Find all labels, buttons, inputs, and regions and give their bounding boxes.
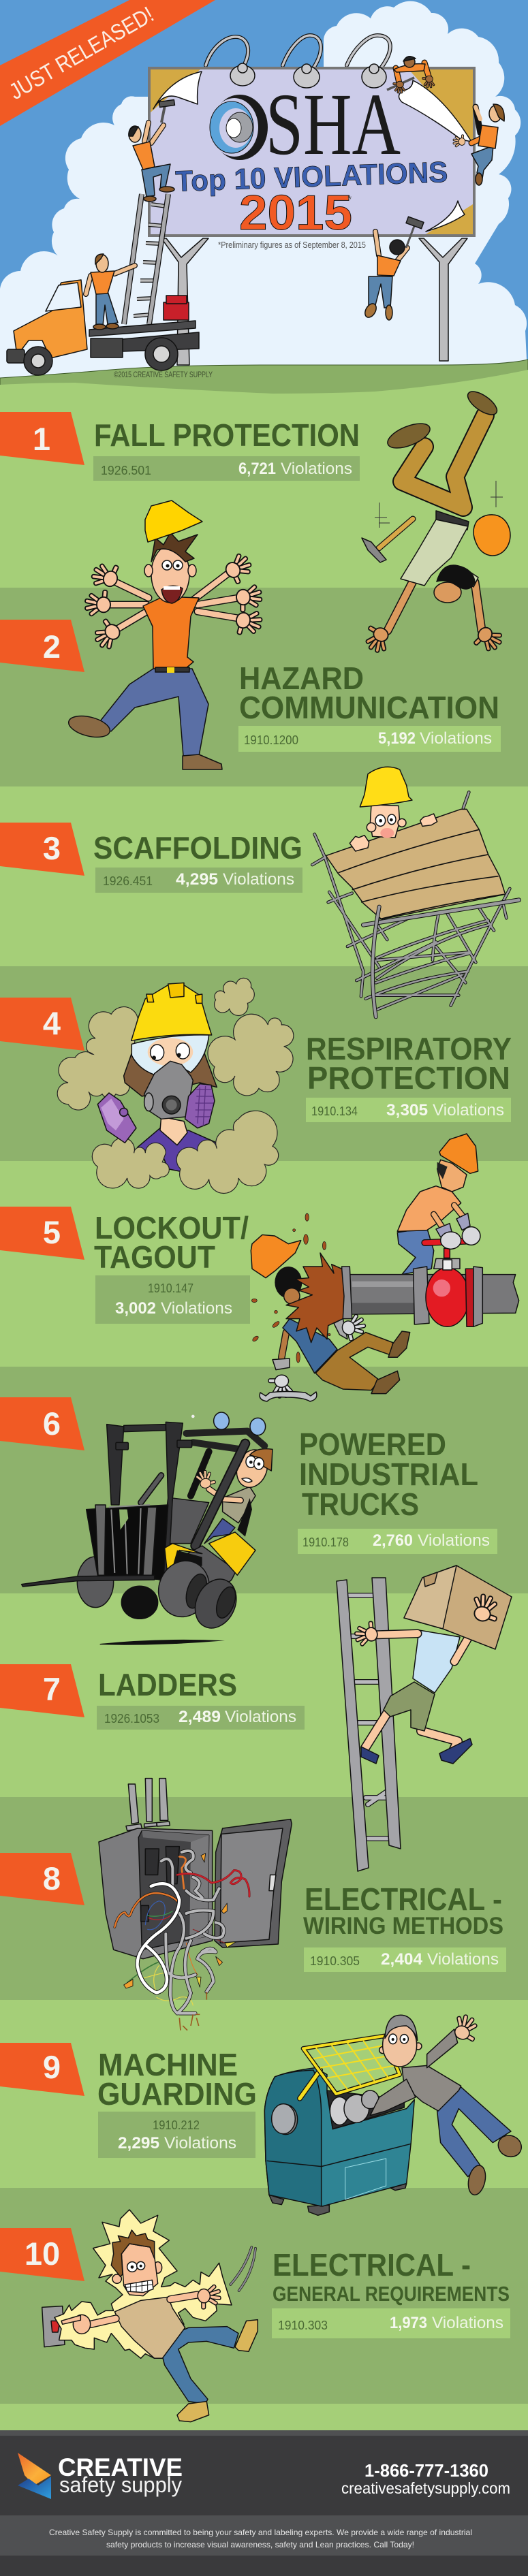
number tag 9 <box>0 2043 84 2096</box>
illustration: worker caught in machine <box>264 2011 525 2215</box>
cage roof and pillar <box>186 1431 264 1546</box>
illustration: worker on ladder carrying box <box>337 1565 512 1871</box>
billboard heading: top 10 violations: Top 10 VIOLATIONS <box>175 156 448 198</box>
lights <box>191 1412 266 1435</box>
stat bar: 1910.305 <box>310 1954 360 1968</box>
hand <box>449 2011 482 2044</box>
thin coloured wires <box>127 1901 225 2005</box>
title: HAZARD <box>239 661 364 696</box>
legs <box>361 1713 472 1764</box>
title: POWERED <box>299 1427 446 1462</box>
ground shadow <box>100 1640 225 1645</box>
panel 3: scaffolding <box>0 767 519 1017</box>
panel 8: electrical wiring methods <box>0 1779 506 2031</box>
stat bar: Violations <box>164 2134 236 2152</box>
pliers <box>230 2247 255 2291</box>
title <box>94 1210 249 1275</box>
banner: just released <box>0 0 215 126</box>
number tag 10 <box>0 2228 84 2281</box>
left side panel <box>264 2070 322 2206</box>
title: WIRING METHODS <box>303 1913 503 1939</box>
worker hanging from sign <box>362 217 424 320</box>
illustration: forklift <box>22 1412 273 1645</box>
title: GUARDING <box>97 2076 257 2112</box>
logo icon <box>18 2453 51 2499</box>
worker on top of sign <box>387 57 435 93</box>
worker on truck <box>86 254 135 330</box>
front tires <box>151 1554 244 1635</box>
body <box>172 1546 236 1612</box>
title: FALL PROTECTION <box>94 417 360 453</box>
panel 2: hazard communication <box>0 500 501 769</box>
illustration: electrical box with tangled wires <box>99 1779 292 2031</box>
arms <box>371 1621 478 1661</box>
stat bar: Violations <box>433 1101 504 1119</box>
shirt <box>138 1128 217 1171</box>
contact: creativesafetysupply.com <box>341 2479 510 2497</box>
stat bar: 3,002 <box>115 1299 156 1318</box>
title <box>306 1031 512 1096</box>
title: SCAFFOLDING <box>93 830 302 865</box>
number tag 3 <box>0 823 84 876</box>
stat bar <box>306 1098 511 1122</box>
title: ELECTRICAL - <box>273 2247 471 2283</box>
number tag 1 <box>0 412 84 465</box>
billboard frame <box>149 68 474 236</box>
panel 1: fall protection <box>0 387 510 657</box>
machine body <box>264 2068 414 2206</box>
filters <box>97 1084 215 1143</box>
stat bar: Violations <box>161 1299 232 1318</box>
arms <box>91 2295 198 2324</box>
illustration: worker in respirator with dust clouds <box>57 978 294 1193</box>
box <box>99 1828 213 1959</box>
company statement: safety products to increase visual awareness, safety and Lean practices. Call Today! <box>106 2540 414 2549</box>
number tag 6: 6 <box>43 1405 61 1442</box>
wire ends <box>179 1992 206 2031</box>
illustration: scaffold and worker <box>312 767 519 1017</box>
stat bar: 2,760 <box>373 1531 413 1550</box>
yellow fender <box>165 1544 202 1580</box>
carriage <box>87 1505 168 1580</box>
grey cables <box>161 1851 224 2014</box>
company statement <box>49 2528 472 2549</box>
stat bar: 1926.1053 <box>104 1712 159 1726</box>
title <box>303 1881 503 1939</box>
access door <box>345 2159 386 2199</box>
number tag 4: 4 <box>43 1005 61 1041</box>
copyright note: ©2015 CREATIVE SAFETY SUPPLY <box>114 370 213 379</box>
number tag 4 <box>0 998 84 1051</box>
billboard heading: 2015: 2015 <box>239 186 352 240</box>
stat bar: Violations <box>225 1708 296 1726</box>
number tag 5 <box>0 1207 84 1260</box>
feet <box>269 2184 407 2215</box>
truck <box>7 280 199 375</box>
contact <box>341 2460 510 2497</box>
number tag 2: 2 <box>43 629 61 665</box>
pipe <box>342 1267 519 1326</box>
stat bar: 1910.1200 <box>244 733 298 747</box>
number tag 3: 3 <box>43 830 61 866</box>
contact: 1-866-777-1360 <box>364 2460 488 2481</box>
worker face <box>360 767 412 838</box>
flying hard hat <box>251 1235 301 1278</box>
panel 7: ladders <box>0 1565 512 1871</box>
eyes <box>151 1043 189 1060</box>
number tag 7: 7 <box>43 1671 61 1707</box>
number tag 10: 10 <box>25 2236 60 2272</box>
hair <box>124 1053 217 1096</box>
open hand <box>197 2284 222 2310</box>
face <box>148 1038 193 1066</box>
poles <box>312 792 510 1010</box>
number tag 2 <box>0 620 84 672</box>
worker hands <box>350 814 437 851</box>
stat bar: Violations <box>418 1531 490 1550</box>
shoes <box>177 2320 258 2422</box>
number tag 5: 5 <box>43 1214 61 1250</box>
switch box <box>42 2306 65 2347</box>
title: LADDERS <box>98 1667 237 1702</box>
title: ELECTRICAL - <box>305 1881 502 1917</box>
sparks <box>55 2210 232 2358</box>
boots <box>466 2131 525 2197</box>
billboard lamps necks <box>206 35 390 68</box>
stat bar <box>97 1706 305 1730</box>
fist and finger <box>61 2315 91 2334</box>
machine opening and gears <box>327 2090 404 2129</box>
panel 5: lockout tagout <box>0 1134 519 1401</box>
stat bar: Violations <box>281 460 352 478</box>
stat bar <box>238 726 501 752</box>
title: LOCKOUT/ <box>95 1210 249 1245</box>
stat bar: Violations <box>427 1950 499 1969</box>
dark blocks <box>141 1847 179 1922</box>
illustration: electric shock <box>42 2210 258 2422</box>
front poles <box>363 900 519 925</box>
stat bar: Violations <box>223 870 294 889</box>
orange and red wires <box>114 1857 249 1927</box>
head <box>379 2015 422 2067</box>
cab interior <box>141 1452 209 1544</box>
billboard illustration <box>7 35 504 379</box>
background: sky <box>0 0 528 409</box>
title: COMMUNICATION <box>239 690 499 725</box>
knob <box>272 2104 298 2135</box>
wire nuts <box>124 1854 227 1988</box>
poster curls <box>153 71 471 232</box>
head <box>111 2230 162 2296</box>
valve and handle <box>424 1213 480 1270</box>
number tag 9: 9 <box>43 2049 61 2085</box>
yellow seat <box>209 1532 255 1575</box>
boards <box>326 809 506 919</box>
shirt <box>413 1630 460 1693</box>
stat bar: 1926.501 <box>101 464 151 477</box>
stat bar: 4,295 <box>176 870 218 889</box>
panel 10: electrical general requirements <box>0 2210 510 2422</box>
osha logo <box>210 76 401 174</box>
mast <box>107 1422 192 1580</box>
worker on right edge <box>453 104 504 185</box>
billboard posts <box>161 238 467 365</box>
ladder <box>337 1578 401 1871</box>
rear tire middle <box>121 1586 158 1619</box>
number tag 1: 1 <box>33 421 50 457</box>
rear tire left <box>77 1557 114 1608</box>
stat bar <box>272 2308 510 2338</box>
stat bar: 5,192 <box>378 729 416 748</box>
stat bar: 1926.451 <box>103 874 153 888</box>
pants <box>162 2327 238 2404</box>
title <box>239 661 499 725</box>
stat bar <box>93 456 360 481</box>
stat bar: 1910.303 <box>278 2319 328 2332</box>
big white cable <box>138 1883 179 1993</box>
osha logo: SHA <box>266 76 401 174</box>
number tag 7 <box>0 1664 84 1717</box>
illustration: falling worker <box>360 387 510 657</box>
stat bar <box>95 868 302 893</box>
illustration: worker with six arms <box>67 500 264 769</box>
stat bar: 6,721 <box>238 460 276 478</box>
stat bar: Violations <box>432 2314 503 2332</box>
sludge drops <box>251 1213 330 1363</box>
background: cloud <box>0 1 528 388</box>
box <box>404 1565 512 1649</box>
stat bar: 1910.134 <box>311 1104 358 1118</box>
goggles <box>131 1035 209 1075</box>
dust clouds <box>57 978 294 1193</box>
number tag 6 <box>0 1397 84 1450</box>
title: TRUCKS <box>302 1486 419 1522</box>
title: TAGOUT <box>94 1239 215 1275</box>
title: INDUSTRIAL <box>299 1457 478 1492</box>
stat bar <box>98 2112 255 2158</box>
stat bar <box>95 1275 250 1324</box>
title: PROTECTION <box>307 1060 510 1096</box>
title <box>299 1427 478 1522</box>
driver <box>194 1446 273 1544</box>
fork <box>22 1575 155 1587</box>
stat bar: Violations <box>420 729 492 748</box>
title: MACHINE <box>98 2047 238 2082</box>
stat bar: 2,404 <box>381 1950 423 1969</box>
stat bar <box>304 1947 506 1972</box>
wrench <box>260 1392 317 1401</box>
logo wordmark: CREATIVE <box>58 2453 183 2481</box>
number tag 8 <box>0 1853 84 1905</box>
logo wordmark: safety supply <box>59 2472 182 2497</box>
mask <box>144 1061 193 1119</box>
panel 4: respiratory protection <box>0 978 512 1193</box>
title: RESPIRATORY <box>306 1031 512 1066</box>
company statement: Creative Safety Supply is committed to being your safety and labeling experts. We provide a wide range of industrial <box>49 2528 472 2537</box>
stat bar: 2,295 <box>118 2134 159 2152</box>
worker on ladder <box>129 100 174 202</box>
hard hat <box>131 983 212 1040</box>
panel 6: powered industrial trucks <box>0 1397 497 1645</box>
top worker <box>397 1134 478 1275</box>
conduits <box>126 1779 170 1830</box>
illustration: pipe, valve and workers <box>251 1134 519 1399</box>
footer <box>0 2430 528 2576</box>
billboard lamps heads <box>230 63 386 88</box>
ladder <box>124 194 168 324</box>
asterisk: * <box>347 194 352 206</box>
stat bar: 3,305 <box>386 1101 428 1119</box>
stat bar <box>298 1529 497 1554</box>
shirt <box>370 2029 461 2116</box>
panel 9: machine guarding <box>0 2011 525 2215</box>
shirt <box>114 2297 185 2358</box>
jeans <box>437 2087 511 2177</box>
guard frame <box>300 2036 400 2099</box>
door <box>215 1819 292 1947</box>
stat bar: 2,489 <box>178 1708 221 1726</box>
neck <box>160 1117 187 1145</box>
shorts <box>384 1682 435 1731</box>
stat bar: 1910.178 <box>302 1536 349 1549</box>
logo wordmark <box>58 2453 183 2497</box>
stat bar: 1,973 <box>390 2314 427 2332</box>
title <box>97 2047 257 2112</box>
number tag 8: 8 <box>43 1860 61 1896</box>
falling worker <box>268 1253 410 1399</box>
billboard poster <box>151 69 473 234</box>
stat bar: 1910.147 <box>148 1282 193 1295</box>
stat bar: 1910.212 <box>153 2118 200 2132</box>
title <box>273 2247 510 2306</box>
preliminary note: *Preliminary figures as of September 8, 2015 <box>218 240 366 250</box>
